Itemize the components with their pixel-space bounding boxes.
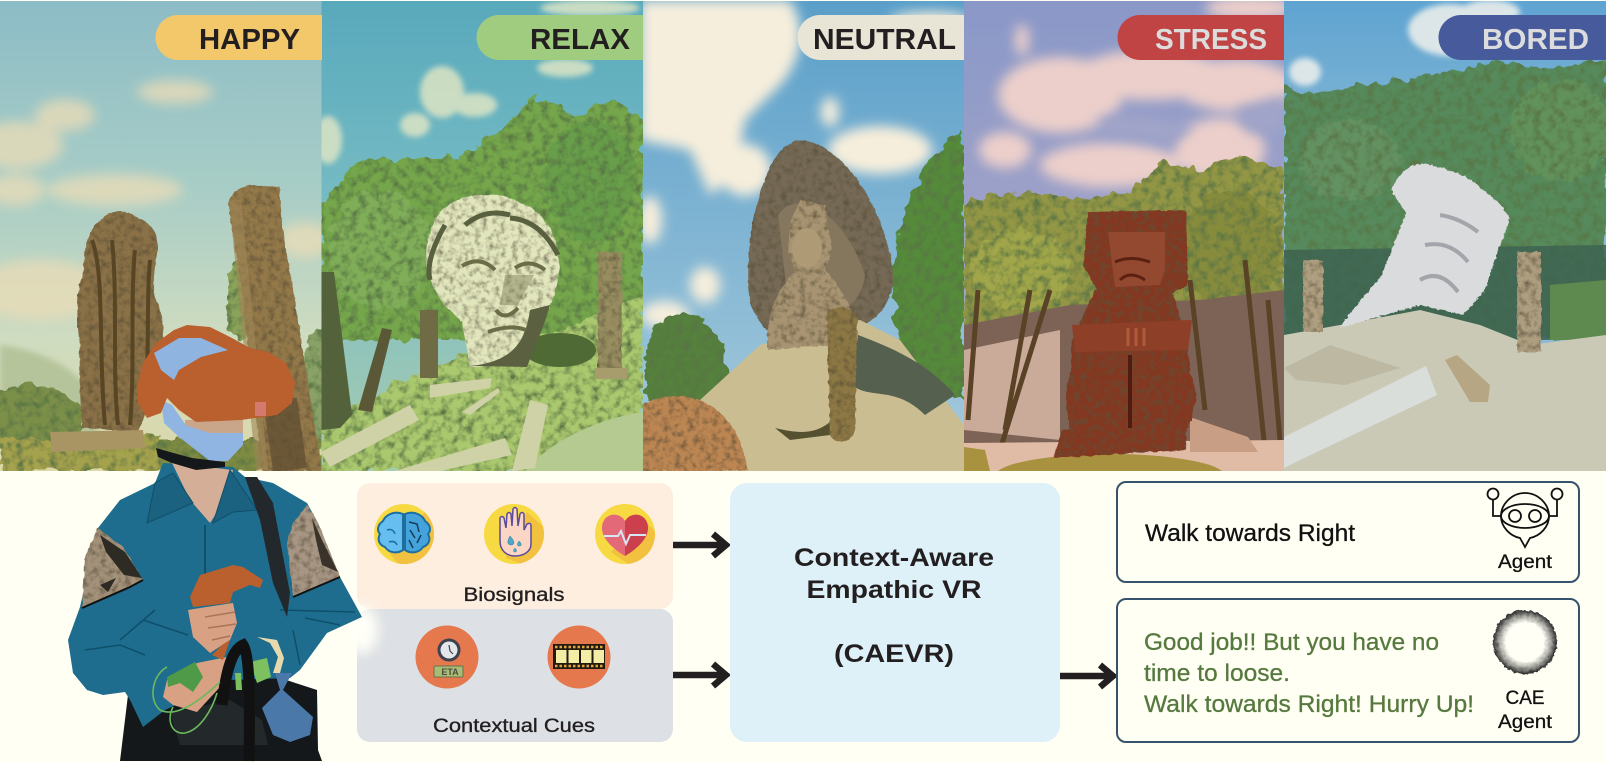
sensor: finger [167, 662, 203, 692]
label: CAE agent: Agent [1498, 712, 1553, 733]
arrow: contextual cues to CAEVR [673, 664, 726, 686]
heading: CAEVR name [794, 544, 994, 668]
sand ground [645, 320, 964, 471]
buddha [767, 200, 858, 350]
forest [1284, 60, 1606, 340]
panel: contextual cues [357, 609, 673, 742]
heading: CAEVR name: Empathic VR [806, 576, 982, 604]
icon: heart with pulse [595, 504, 657, 566]
indicator [255, 402, 266, 416]
stone stairs [1190, 417, 1258, 452]
text: empathic response [1144, 629, 1474, 718]
pink clouds [979, 0, 1295, 187]
statue [77, 212, 163, 432]
tag: neutral: NEUTRAL [813, 24, 956, 56]
columns [1303, 260, 1323, 332]
tag: neutral [798, 15, 964, 60]
panel: stress scene [964, 0, 1295, 498]
egg rock [748, 141, 893, 345]
blue patch [262, 673, 313, 742]
grass [321, 295, 643, 471]
label: biosignals: Biosignals [464, 584, 565, 606]
skull strap [154, 338, 228, 380]
sculpted head [426, 195, 559, 367]
label: CAE agent [1498, 688, 1553, 733]
icon: clock and ETA [416, 626, 478, 688]
shirt [68, 463, 362, 727]
arrow: CAEVR to agent [1060, 665, 1113, 687]
icon: CAE agent ring [1493, 610, 1557, 674]
lower body and bag [120, 673, 322, 761]
panel: neutral scene [638, 0, 970, 471]
heading: CAEVR name: (CAEVR) [834, 640, 954, 668]
panel: relax scene [314, 0, 643, 471]
label: agent: Agent [1498, 552, 1553, 573]
text: empathic response: Good job!! But you have no [1144, 629, 1439, 656]
shell [138, 325, 295, 422]
tag: bored: BORED [1482, 24, 1589, 56]
tag: relax [476, 15, 643, 60]
icon: clock and ETA: ETA [441, 667, 459, 677]
collar [147, 470, 257, 523]
red idol [1053, 210, 1196, 458]
tag: relax: RELAX [530, 24, 631, 56]
VR headset [138, 325, 295, 470]
sand [1284, 310, 1606, 471]
sensor wires [153, 667, 220, 733]
mask [161, 400, 243, 461]
tag: happy: HAPPY [199, 24, 300, 56]
person wearing VR headset [68, 325, 378, 761]
icon: brain [374, 504, 434, 564]
tag: bored [1438, 15, 1606, 60]
text: empathic response: Walk towards Right! Hurry Up! [1144, 691, 1474, 718]
heading: CAEVR name: Context-Aware [794, 544, 994, 572]
tag: stress [1118, 15, 1284, 60]
forest [321, 97, 643, 340]
rock [641, 396, 748, 471]
icon: robot agent [1488, 488, 1562, 547]
panel: agent output [1117, 482, 1579, 582]
neck and chest [172, 463, 233, 523]
column [228, 185, 322, 471]
wrist band [257, 637, 284, 673]
panel: CAEVR [730, 483, 1060, 742]
trees [645, 130, 964, 400]
face [185, 418, 243, 433]
text: agent line: Walk towards Right [1145, 520, 1355, 547]
lower hand [163, 657, 227, 712]
upper hand [188, 603, 237, 653]
panel: happy scene [0, 1, 340, 471]
camo sleeves [82, 528, 143, 608]
text: empathic response: time to loose. [1144, 660, 1290, 687]
shirt folds [85, 610, 355, 665]
fallen column [1284, 366, 1437, 468]
VR controller [190, 565, 263, 660]
bag strap [245, 477, 290, 617]
columns [598, 252, 622, 374]
tag: happy [156, 15, 322, 60]
forest [964, 155, 1284, 340]
panel: biosignals [357, 483, 673, 609]
halo [346, 606, 378, 654]
column [827, 308, 857, 442]
icon: sweating hand [484, 504, 547, 566]
marble hand [1339, 164, 1509, 328]
panel: CAE agent output [1117, 599, 1579, 742]
icon: film strip [548, 626, 610, 688]
label: contextual cues: Contextual Cues [433, 715, 595, 737]
forest floor [964, 290, 1284, 443]
neck band [156, 448, 225, 470]
sensor: wrist [235, 658, 271, 690]
black bag handle [222, 645, 249, 761]
tag: stress: STRESS [1155, 24, 1267, 56]
label: CAE agent: CAE [1506, 688, 1544, 709]
statue base [50, 430, 145, 452]
panel: bored scene [1284, 0, 1606, 471]
arrow: biosignals to CAEVR [673, 534, 726, 556]
